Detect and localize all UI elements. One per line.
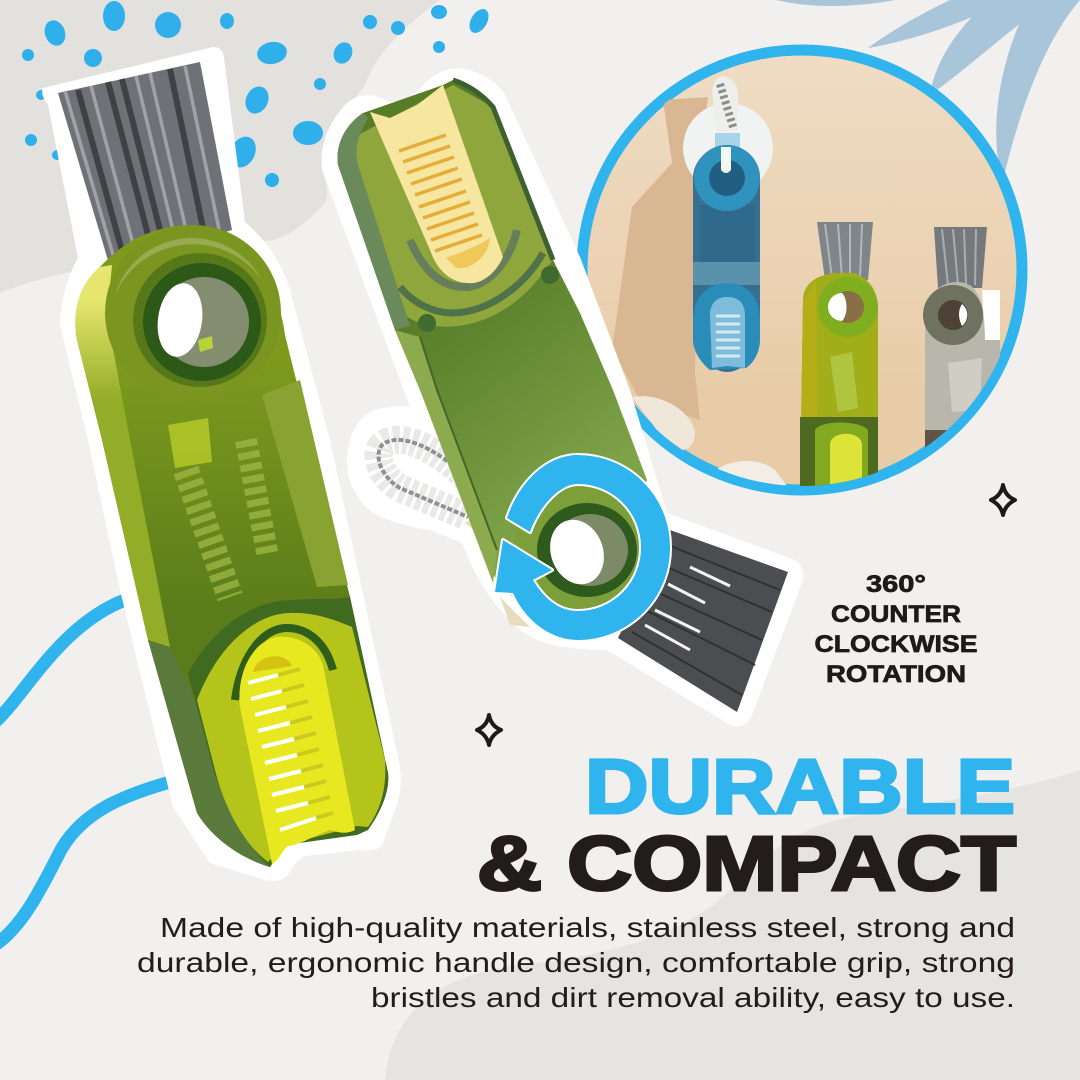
inner coils	[168, 418, 268, 597]
sparkle right	[991, 485, 1015, 515]
side strip	[75, 265, 170, 647]
upper panel	[353, 85, 553, 327]
bristles	[58, 62, 232, 267]
wall shadow	[612, 97, 708, 420]
left brush	[42, 47, 401, 881]
blue brush	[683, 76, 773, 372]
yellow brush head	[370, 85, 503, 283]
rotation caption	[814, 571, 978, 688]
rotation caption: COUNTER	[831, 601, 961, 628]
leaves top right	[776, 0, 1080, 172]
side strip	[395, 330, 497, 583]
inset photo circle	[582, 50, 1022, 490]
lower side strip	[148, 640, 270, 867]
description: bristles and dirt removal ability, easy to use.	[371, 982, 1015, 1013]
sparkle left	[477, 715, 501, 745]
grey brush	[923, 227, 1000, 460]
description	[137, 912, 1015, 1013]
heading	[477, 744, 1016, 907]
ring	[105, 225, 281, 401]
handle	[337, 80, 647, 620]
handle	[75, 225, 388, 867]
right brush	[321, 68, 803, 726]
description: durable, ergonomic handle design, comfortable grip, strong	[137, 947, 1015, 978]
rotation caption: 360°	[866, 571, 926, 598]
green brush	[800, 222, 878, 490]
blue splatter dots	[22, 1, 492, 187]
twisted wire brush	[378, 440, 500, 550]
yellow brush head	[239, 637, 355, 864]
grey bristles	[618, 530, 788, 712]
lower ring hole	[500, 483, 642, 627]
lower panel	[197, 613, 385, 862]
bowls	[632, 396, 695, 450]
light right strip	[262, 380, 348, 587]
heading: & COMPACT	[477, 821, 1016, 907]
blue curved lines left	[0, 600, 170, 945]
description: Made of high-quality materials, stainless steel, strong and	[160, 912, 1015, 943]
sticker outline	[321, 68, 803, 726]
lower dark arch	[188, 597, 388, 867]
rotation caption: ROTATION	[826, 661, 966, 688]
heading: DURABLE	[585, 744, 1015, 830]
rotation arrow	[495, 455, 670, 640]
rotation caption: CLOCKWISE	[814, 631, 978, 658]
sticker outline	[42, 47, 401, 881]
